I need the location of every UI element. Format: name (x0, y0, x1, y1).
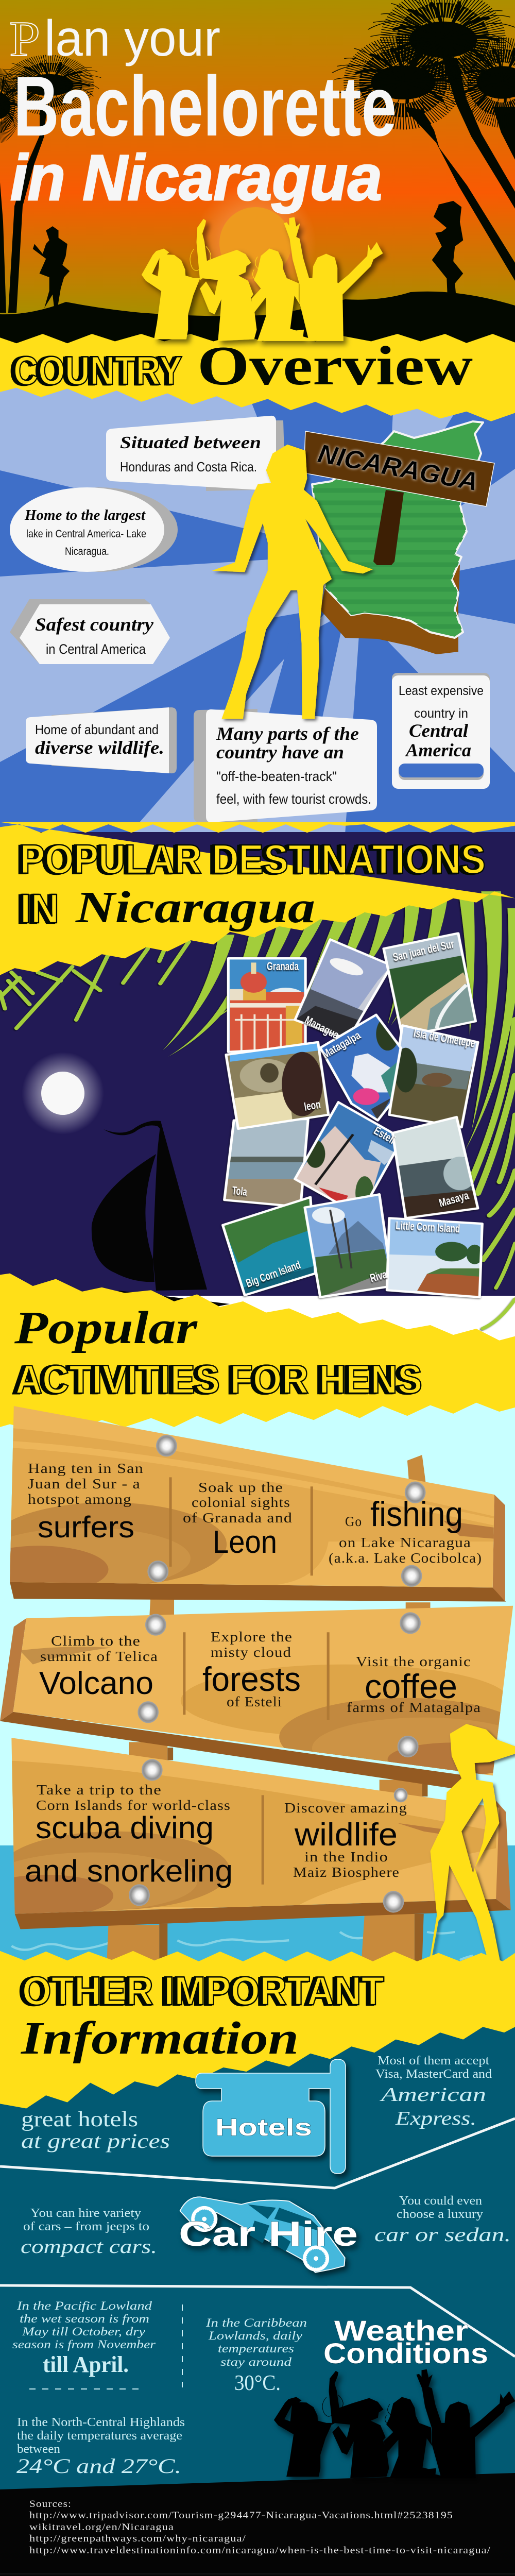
wooden sign board 1 (0, 1406, 506, 1602)
text: car variety (21, 2207, 157, 2258)
yellow band: popular destinations (0, 822, 515, 975)
photo collage (222, 932, 483, 1297)
sign text: surfers, leon, fishing: Leon (213, 1524, 277, 1560)
sign text: scuba diving, wildlife: wildlife (294, 1817, 398, 1853)
text: caribbean lowlands weather: 30°C. (234, 2371, 281, 2395)
singer silhouette right (432, 201, 463, 295)
sign text: surfers, leon, fishing: of Granada and (183, 1510, 293, 1526)
sign text: surfers, leon, fishing: on Lake Nicaragua (339, 1535, 471, 1550)
sources text: http://greenpathways.com/why-nicaragua/ (29, 2533, 246, 2544)
text: great hotels: great hotels (21, 2108, 138, 2131)
sign text: volcano, forests, coffee: Climb to the (51, 1633, 141, 1649)
info card: off the beaten track: Many parts of the (216, 723, 359, 744)
text: north central highlands weather: the daily temperatures average (17, 2429, 182, 2443)
info card: largest lake: Home to the largest (24, 507, 146, 523)
sign text: scuba diving, wildlife: Corn Islands for world-class (36, 1798, 231, 1813)
info card: safest country (10, 599, 170, 664)
heading: other important information (21, 1968, 384, 2064)
info card: diverse wildlife: Home of abundant and (35, 722, 159, 737)
info card: situated between: Situated between (120, 433, 261, 452)
info card: least expensive: Central (409, 720, 468, 741)
text: north central highlands weather: 24°C and 27°C. (16, 2454, 181, 2478)
text: credit cards: Express. (395, 2108, 476, 2129)
info card: least expensive: country in (414, 706, 468, 721)
info card: largest lake (10, 487, 178, 572)
header panel: sunset sky (0, 0, 515, 361)
text: pacific lowland weather: May till October, dry (22, 2325, 146, 2338)
info card: diverse wildlife (26, 707, 177, 773)
title: plan your bachelorette in nicaragua: in Nicaragua (10, 142, 382, 214)
heading: popular destinations: IN (20, 886, 59, 931)
text: credit cards (375, 2054, 492, 2129)
map of nicaragua (309, 421, 484, 654)
photo labels: Matagalpa (320, 1028, 363, 1061)
title: plan your bachelorette in nicaragua: Bachelorette (13, 59, 397, 154)
car hire icon: Car Hire (179, 2214, 358, 2253)
text: luxury car: choose a luxury (397, 2208, 483, 2221)
palm trees left (0, 58, 101, 313)
text: caribbean lowlands weather: stay around (220, 2355, 292, 2368)
sign text: volcano, forests, coffee: Volcano (39, 1666, 153, 1701)
info card: situated between: Honduras and Costa Rica. (120, 459, 257, 474)
text: luxury car (374, 2194, 511, 2246)
signpost: nicaragua: NICARAGUA (316, 439, 480, 497)
hotels sign icon (196, 2059, 346, 2174)
sign text: surfers, leon, fishing: Juan del Sur - a (28, 1476, 141, 1492)
footer panel: sources and credits (0, 2473, 515, 2576)
sign text: volcano, forests, coffee: farms of Matagalpa (347, 1700, 481, 1715)
signpost posts (107, 1455, 431, 1963)
text: caribbean lowlands weather: Lowlands, daily (208, 2329, 303, 2342)
sources text: Sources: (29, 2499, 72, 2510)
text: north central highlands weather (16, 2416, 185, 2478)
info card: largest lake: lake in Central America- Lake (26, 528, 146, 540)
photo: esteli (295, 1102, 402, 1215)
photo labels (231, 937, 476, 1290)
hotels sign icon: Hotels (215, 2114, 312, 2141)
sign text: scuba diving, wildlife: Take a trip to the (37, 1782, 162, 1798)
photo labels: Little Corn Island (396, 1219, 460, 1235)
text: great hotels (21, 2108, 170, 2153)
heading: country overview: COUNTRY (13, 348, 182, 393)
wooden sign board 2 (0, 1606, 515, 1789)
dancing girls silhouette black (274, 2369, 515, 2478)
photo: isla de ometepe (389, 1025, 478, 1127)
info card: off the beaten track: country have an (216, 742, 344, 762)
photo labels: San juan del Sur (392, 937, 455, 964)
heading: country overview: Overview (197, 335, 473, 397)
text: pacific lowland weather: season is from November (12, 2338, 156, 2351)
info card: least expensive (392, 673, 490, 789)
moon (22, 1052, 104, 1134)
heading: popular activities for hens: ACTIVITIES FOR HENS (15, 1357, 422, 1402)
title: plan your bachelorette in nicaragua (9, 10, 397, 214)
photo: big corn island (222, 1197, 315, 1295)
divider lines (0, 2119, 515, 2357)
photo: riva (305, 1194, 392, 1297)
heading: weather conditions: Weather (334, 2314, 468, 2347)
text: north central highlands weather: In the North-Central Highlands (17, 2416, 185, 2429)
info card: situated between (106, 416, 285, 491)
sign text: surfers, leon, fishing: Go (345, 1514, 362, 1529)
sign text: volcano, forests, coffee: summit of Telica (40, 1649, 158, 1664)
signpost: nicaragua (304, 431, 494, 565)
photo labels: Riva (368, 1268, 389, 1285)
sign text: scuba diving, wildlife: Discover amazing (284, 1800, 407, 1816)
info card: least expensive: America (405, 740, 471, 760)
heading: other important information: Information (21, 2013, 299, 2064)
photo labels: Tola (231, 1184, 248, 1198)
text: pacific lowland weather (12, 2299, 156, 2377)
text: credit cards: American (379, 2084, 486, 2106)
heading: popular destinations (20, 836, 486, 932)
woman silhouette (212, 445, 373, 719)
text: caribbean lowlands weather: In the Caribbean (205, 2316, 307, 2329)
wooden sign board 3 (0, 1738, 511, 1929)
sign text: scuba diving, wildlife: Maiz Biosphere (293, 1865, 400, 1880)
text: car variety: compact cars. (21, 2236, 157, 2258)
sources text: http://www.traveldestinationinfo.com/nicaragua/when-is-the-best-time-to-visit-nicaragua/ (29, 2545, 491, 2556)
yellow band: popular activities (0, 1274, 515, 1430)
section panel: country overview background rays (0, 386, 515, 835)
palm leaves (0, 891, 515, 1328)
text: north central highlands weather: between (17, 2443, 60, 2456)
info card: largest lake: Nicaragua. (65, 546, 109, 557)
sign text: scuba diving, wildlife: scuba diving (36, 1810, 214, 1845)
sign text: surfers, leon, fishing: fishing (370, 1495, 463, 1534)
photo: masaya (392, 1117, 478, 1218)
info card: safest country: Safest country (35, 614, 154, 635)
heading: country overview (13, 335, 473, 397)
sources text (29, 2499, 491, 2556)
yellow band: other information (0, 1951, 515, 2109)
photo labels: Managua (303, 1013, 341, 1042)
sign text: surfers, leon, fishing: Hang ten in San (28, 1461, 144, 1476)
sign text: volcano, forests, coffee: Visit the organic (356, 1654, 471, 1669)
sign text: surfers, leon, fishing: (a.k.a. Lake Cocibolca) (329, 1550, 482, 1566)
yellow band lower zigzag (0, 381, 515, 421)
text: pacific lowland weather: In the Pacific Lowland (16, 2299, 152, 2312)
text: great hotels: at great prices (21, 2129, 170, 2153)
photo labels: Granada (267, 960, 299, 973)
sign text: scuba diving, wildlife (25, 1782, 407, 1888)
heading: weather conditions (323, 2314, 488, 2369)
sign text: volcano, forests, coffee (39, 1629, 481, 1715)
info card: off the beaten track (194, 709, 377, 822)
photo: tola (224, 1117, 309, 1210)
sign text: volcano, forests, coffee: Explore the (211, 1629, 293, 1645)
palm trees right (332, 0, 515, 281)
heading: other important information: OTHER IMPORTANT (22, 1968, 384, 2013)
sailboat silhouette (92, 1121, 230, 1319)
sign text: volcano, forests, coffee: coffee (365, 1667, 457, 1705)
woman silhouette by the sign (428, 1724, 515, 1965)
photo labels: Esteli (371, 1124, 398, 1146)
sign nails (129, 1435, 426, 1913)
sources text: http://www.tripadvisor.com/Tourism-g294477-Nicaragua-Vacations.html#25238195 (29, 2510, 453, 2521)
car hire icon (179, 2197, 358, 2273)
yellow band: country overview (0, 334, 515, 394)
title: plan your bachelorette in nicaragua: lan your (44, 10, 220, 66)
info card: diverse wildlife: diverse wildlife. (35, 737, 164, 758)
sign text: scuba diving, wildlife: in the Indio (304, 1849, 388, 1865)
heading: popular activities for hens: Popular (14, 1302, 198, 1353)
heading: popular destinations: Nicaragua (75, 882, 315, 932)
photo labels: leon (303, 1098, 321, 1113)
dancer silhouette left (33, 226, 70, 308)
sign text: surfers, leon, fishing (28, 1461, 482, 1566)
sign text: volcano, forests, coffee: of Esteli (227, 1694, 282, 1709)
sign text: surfers, leon, fishing: hotspot among (28, 1492, 132, 1507)
info card: off the beaten track: feel, with few tourist crowds. (216, 791, 371, 807)
photo labels: Big Corn Island (244, 1258, 302, 1290)
text: credit cards: Visa, MasterCard and (375, 2067, 492, 2081)
sign text: surfers, leon, fishing: Soak up the (198, 1480, 283, 1495)
photo: little corn island (387, 1218, 483, 1297)
info card: safest country: in Central America (46, 641, 146, 657)
text: caribbean lowlands weather: temperatures (218, 2342, 294, 2355)
photo labels: Masaya (437, 1189, 471, 1210)
sun (195, 182, 316, 304)
photo: granada (228, 958, 305, 1054)
info card: off the beaten track: "off-the-beaten-track" (216, 769, 337, 784)
info card: least expensive: Least expensive (399, 684, 484, 698)
dark hills (0, 292, 515, 350)
text: caribbean lowlands weather (205, 2316, 307, 2395)
heading: popular activities for hens (14, 1302, 422, 1402)
photo: san juan del sur (381, 932, 479, 1038)
sign text: scuba diving, wildlife: and snorkeling (25, 1854, 233, 1888)
sources text: wikitravel.org/en/Nicaragua (29, 2522, 174, 2533)
text: luxury car: You could even (399, 2194, 482, 2208)
sign text: volcano, forests, coffee: forests (202, 1660, 301, 1698)
text: pacific lowland weather: the wet season is from (20, 2312, 149, 2325)
photo: managua (295, 939, 391, 1039)
heading: weather conditions: Conditions (323, 2337, 488, 2369)
sign text: surfers, leon, fishing: surfers (38, 1511, 134, 1544)
water waves (11, 1932, 473, 1960)
text: car variety: of cars – from jeeps to (23, 2220, 149, 2233)
footer divider (0, 2573, 515, 2574)
dancing girls silhouette yellow (142, 217, 383, 341)
text: car variety: You can hire variety (30, 2207, 141, 2220)
section panel: activities sky and sea (0, 1391, 515, 1969)
dashed separators (29, 2304, 182, 2389)
section panel: popular destinations (0, 832, 515, 1296)
section panel: other important information (0, 2007, 515, 2538)
photo: matagalpa (320, 1015, 401, 1121)
title: plan your bachelorette in nicaragua: P (9, 11, 40, 67)
text: pacific lowland weather: till April. (43, 2352, 129, 2377)
sign text: surfers, leon, fishing: colonial sights (192, 1495, 290, 1510)
text: credit cards: Most of them accept (377, 2054, 489, 2067)
photo: leon (226, 1042, 329, 1129)
text: luxury car: car or sedan. (374, 2224, 511, 2246)
photo labels: Isla de Ometepe (413, 1026, 476, 1050)
sign text: volcano, forests, coffee: misty cloud (211, 1645, 291, 1660)
